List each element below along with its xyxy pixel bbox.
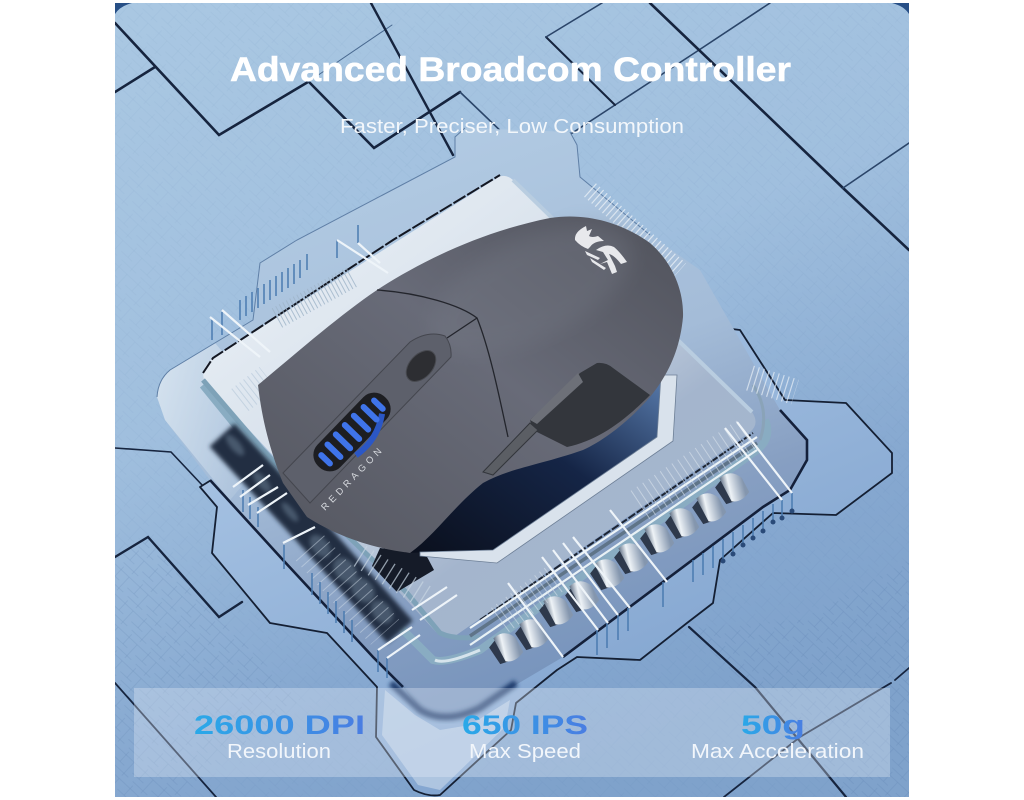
- mouse: [258, 198, 683, 553]
- side button front: [483, 423, 538, 475]
- chip lip: [203, 385, 767, 661]
- chip top black line: [203, 175, 500, 373]
- wheel slot: [313, 392, 391, 472]
- stat: max acceleration: [691, 710, 864, 763]
- plate left corner highlight: [157, 344, 241, 500]
- plate lower dark edges: [210, 410, 807, 687]
- stat: resolution: 26000 DPI: [194, 710, 365, 740]
- stat: max acceleration: Max Acceleration: [691, 741, 864, 763]
- stat: max speed: Max Speed: [469, 741, 581, 763]
- stat: max acceleration: 50g: [741, 710, 805, 740]
- mouse shadow: [406, 384, 660, 553]
- long pin accents: [210, 240, 792, 658]
- shadow frame: [420, 375, 677, 563]
- title: Advanced Broadcom Controller: [230, 51, 791, 89]
- stat: resolution: [194, 710, 365, 763]
- dragon logo: [575, 226, 627, 274]
- blue pin stems: [212, 225, 792, 678]
- side panel: [530, 363, 650, 447]
- mouse body: [258, 217, 683, 553]
- subtitle: Faster, Preciser, Low Consumption: [340, 116, 684, 138]
- button strip: [283, 334, 451, 503]
- background circuit board: [115, 3, 909, 797]
- capacitors along lower-right edge: [486, 468, 751, 668]
- pin combs: [240, 190, 795, 632]
- chip base plate: [157, 128, 807, 718]
- component highlights: [223, 432, 397, 628]
- stat: max speed: 650 IPS: [462, 710, 588, 740]
- dark stripes under mouse front: [372, 548, 434, 592]
- front shell seam lines: [377, 290, 508, 437]
- brand name: REDRAGON: [319, 444, 387, 513]
- DPI button: [406, 350, 436, 382]
- stats panel: [134, 688, 890, 777]
- side button rear: [530, 373, 583, 424]
- stat: max speed: [462, 710, 588, 763]
- chip rim white lines: [435, 385, 764, 661]
- plate bottom shadow: [391, 683, 516, 717]
- stem end dots: [720, 508, 794, 564]
- outer chip plate with bottom tab: [200, 300, 892, 795]
- chip left glass rim: [203, 380, 480, 638]
- circuit trace lines: [115, 3, 909, 797]
- chip top surface: [203, 176, 756, 637]
- scroll wheel: [313, 392, 391, 472]
- tab highlight: [382, 690, 510, 790]
- dark component band lower-left: [222, 435, 400, 632]
- rear sheen: [496, 222, 625, 316]
- wheel ribs: [318, 398, 386, 466]
- chip top-right rim: [513, 180, 752, 412]
- stat: resolution: Resolution: [227, 741, 331, 763]
- wheel glow: [354, 413, 385, 458]
- upper plate outline: [157, 128, 650, 397]
- infographic canvas: [115, 3, 909, 797]
